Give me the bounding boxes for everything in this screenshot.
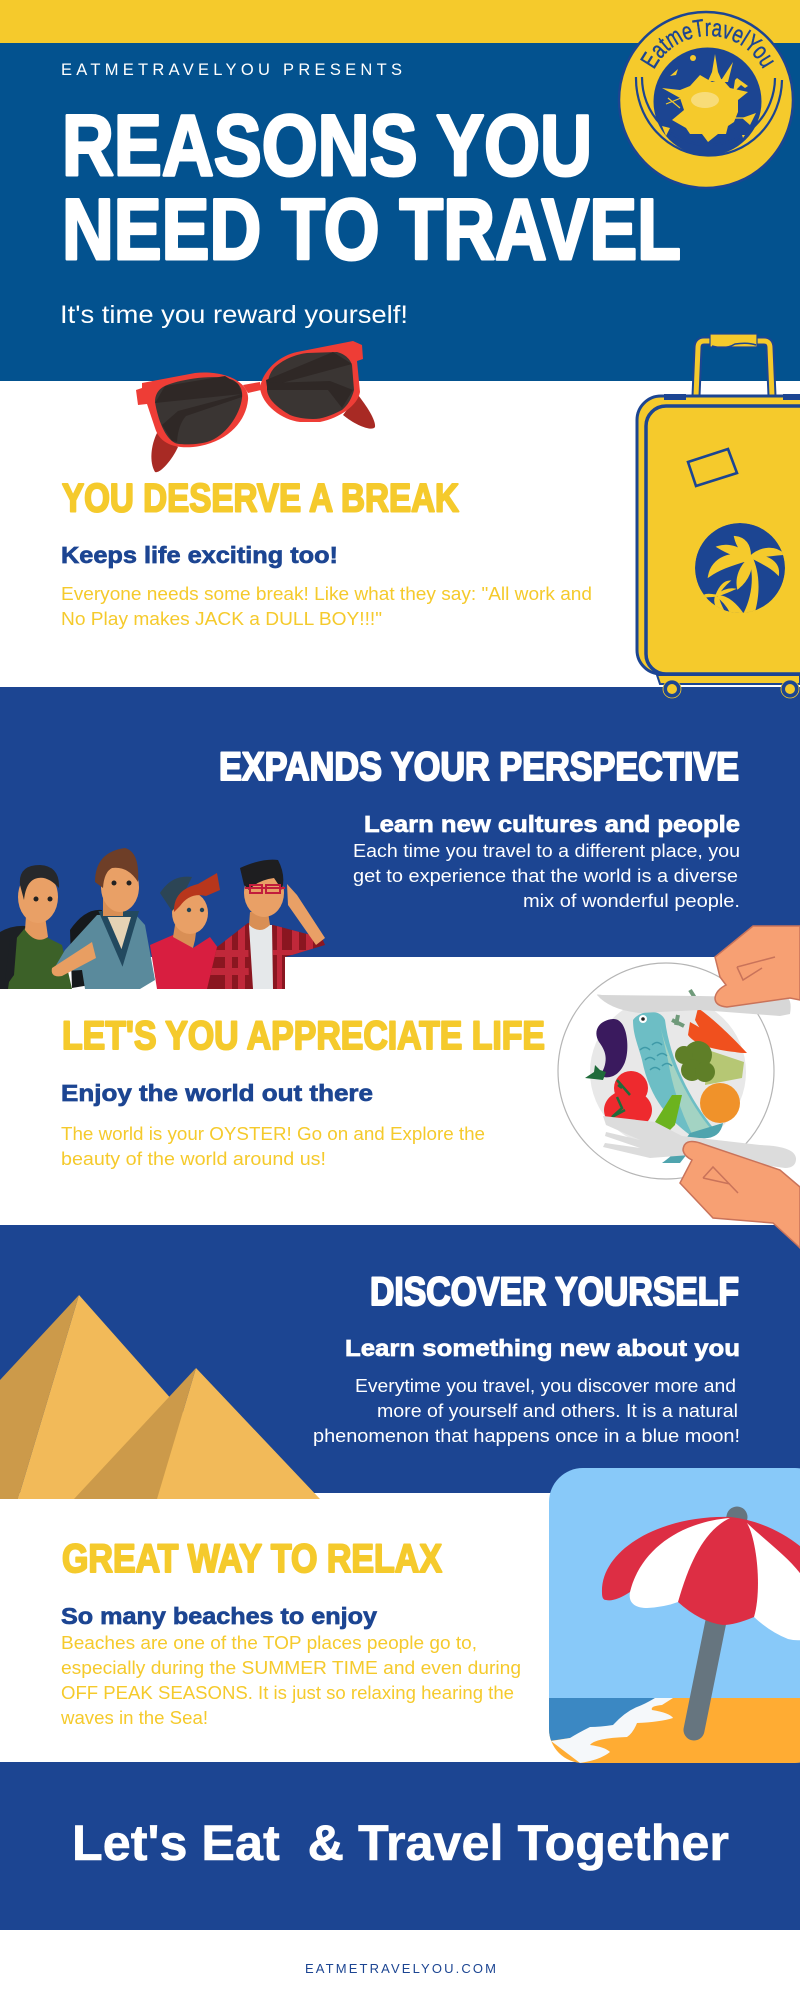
icon: yellow suitcase — [637, 334, 800, 698]
title: NEED TO TRAVEL — [62, 182, 681, 278]
panel: you deserve a break text: Keeps life exciting too! — [61, 542, 338, 568]
top yellow band — [0, 0, 800, 43]
footer call to action: Let's Eat & Travel Together — [72, 1815, 729, 1871]
panel: expands your perspective text: Each time you travel to a different place, you — [353, 841, 740, 861]
panel: you deserve a break text — [61, 476, 592, 629]
food: herbs — [672, 990, 695, 1026]
icon: palm tree badge — [695, 523, 785, 618]
person: red shirt — [150, 873, 232, 989]
illustration: group of four travellers — [0, 848, 328, 989]
website url: EATMETRAVELYOU.COM — [305, 1961, 496, 1976]
food: carrots — [688, 1008, 747, 1053]
icon: fork — [603, 1116, 796, 1168]
icon: luggage tag — [688, 449, 737, 486]
panel: expands your perspective text: get to experience that the world is a diverse — [353, 866, 738, 886]
panel: let's you appreciate life text: beauty of the world around us! — [61, 1149, 326, 1169]
subtitle: It's time you reward yourself! — [60, 301, 408, 329]
title — [62, 98, 681, 278]
icon: EatMeTravelYou logo: EatmeTravelYou — [640, 18, 774, 69]
panel: let's you appreciate life text: LET'S YOU APPRECIATE LIFE — [62, 1014, 545, 1058]
panel: discover yourself background — [0, 1225, 800, 1493]
panel: discover yourself text: DISCOVER YOURSELF — [370, 1270, 739, 1314]
panel: let's you appreciate life text: The world is your OYSTER! Go on and Explore the — [61, 1124, 485, 1144]
panel: great way to relax text: OFF PEAK SEASONS. It is just so relaxing hearing the — [61, 1683, 514, 1703]
person: blue cardigan — [52, 848, 155, 989]
panel: footer call to action background — [0, 1762, 800, 1930]
icon: EatMeTravelYou logo — [618, 10, 794, 190]
title: REASONS YOU — [62, 98, 592, 194]
illustration: plate of food with cutlery and hands — [558, 926, 800, 1248]
panel: let's you appreciate life text: Enjoy the world out there — [61, 1080, 373, 1106]
food: fish — [633, 1012, 715, 1135]
presenter line: EATMETRAVELYOU PRESENTS — [61, 61, 402, 79]
food: fish tail — [662, 1123, 723, 1163]
panel: let's you appreciate life text — [61, 1014, 545, 1169]
food: tomato — [604, 1071, 652, 1130]
icon: knife — [597, 994, 791, 1016]
icon: suitcase wheels — [663, 680, 799, 698]
panel: header background — [0, 43, 800, 381]
panel: discover yourself text — [313, 1270, 740, 1446]
food: broccoli — [675, 1041, 715, 1082]
panel: great way to relax text: waves in the Sea! — [60, 1708, 208, 1728]
icon: upper hand — [715, 926, 800, 1007]
panel: great way to relax text: So many beaches to enjoy — [61, 1603, 377, 1629]
illustration: beach umbrella — [549, 1468, 800, 1763]
panel: discover yourself text: Everytime you travel, you discover more and — [355, 1376, 736, 1396]
panel: discover yourself text: Learn something new about you — [345, 1335, 740, 1361]
food: eggplant stem — [585, 1065, 606, 1080]
illustration: pyramids — [0, 1295, 320, 1499]
panel: great way to relax text: especially during the SUMMER TIME and even during — [61, 1658, 521, 1678]
panel: great way to relax text: Beaches are one of the TOP places people go to, — [61, 1633, 477, 1653]
food: fish belly — [660, 1025, 712, 1134]
panel: expands your perspective text: Learn new cultures and people — [364, 811, 740, 837]
icon: lower hand — [680, 1142, 800, 1248]
panel: expands your perspective background — [0, 687, 800, 957]
panel: you deserve a break text: No Play makes JACK a DULL BOY!!!" — [61, 609, 382, 629]
food: onion — [700, 1083, 740, 1123]
food: lettuce — [655, 1095, 682, 1132]
food: fish eye — [639, 1015, 647, 1023]
icon: red sunglasses — [136, 341, 375, 472]
panel: great way to relax text: GREAT WAY TO RELAX — [62, 1537, 442, 1581]
panel: you deserve a break text: Everyone needs some break! Like what they say: "All work and — [61, 584, 592, 604]
panel: discover yourself text: more of yourself and others. It is a natural — [377, 1401, 738, 1421]
panel: you deserve a break text: YOU DESERVE A BREAK — [62, 476, 459, 520]
food: broccoli stem — [705, 1050, 744, 1085]
person: plaid shirt with glasses — [205, 860, 328, 989]
person: green shirt — [0, 865, 72, 989]
panel: discover yourself text: phenomenon that happens once in a blue moon! — [313, 1426, 740, 1446]
panel: expands your perspective text — [219, 745, 740, 911]
food: eggplant — [596, 1019, 627, 1077]
panel: great way to relax text — [60, 1537, 521, 1728]
food: fish scales — [640, 1042, 672, 1070]
panel: expands your perspective text: mix of wonderful people. — [523, 891, 740, 911]
